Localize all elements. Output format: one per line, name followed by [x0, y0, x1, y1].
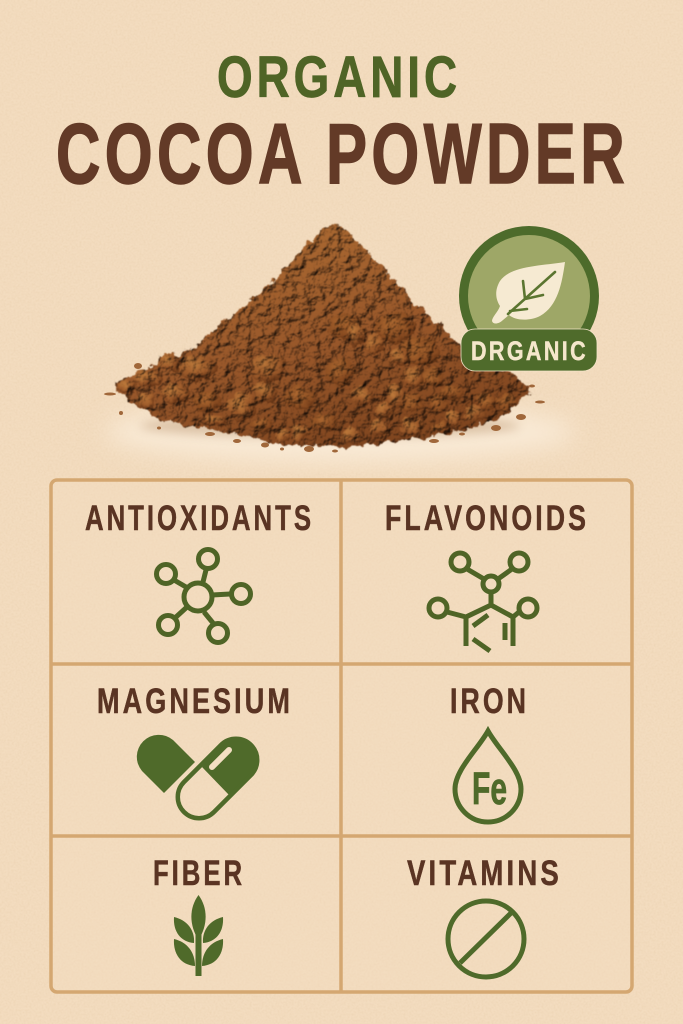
- icon: flavonoid structure: [429, 553, 537, 651]
- icon: capsule pills: [137, 735, 257, 818]
- label: magnesium: MAGNESIUM: [97, 682, 293, 721]
- cell: vitamins: [407, 854, 562, 977]
- label: iron: IRON: [450, 682, 529, 721]
- label: flavonoids: FLAVONOIDS: [385, 499, 589, 538]
- icon: plant sprig: [174, 895, 223, 976]
- cell: fiber: [153, 854, 245, 976]
- cell: antioxidants: [85, 499, 314, 642]
- icon: leaf: [492, 262, 565, 324]
- badge inner disc: [468, 235, 590, 357]
- cell: iron: [450, 682, 529, 822]
- panel: nutrient grid: [51, 480, 632, 992]
- badge: organic seal: [459, 226, 599, 371]
- cell: magnesium: [97, 682, 293, 818]
- badge ribbon: [461, 329, 597, 371]
- title: [56, 45, 629, 202]
- icon: prohibited circle: [448, 901, 524, 977]
- label: antioxidants: ANTIOXIDANTS: [85, 499, 314, 538]
- badge text: DRGANIC: [471, 336, 588, 366]
- cell: flavonoids: [385, 499, 589, 651]
- icon: iron drop: Fe: [472, 763, 507, 814]
- title line: organic: ORGANIC: [217, 45, 461, 110]
- illustration: cocoa powder pile: [104, 223, 575, 462]
- badge ring: [459, 226, 599, 366]
- label: fiber: FIBER: [153, 854, 245, 893]
- icon: molecule: [156, 550, 250, 642]
- label: vitamins: VITAMINS: [407, 854, 562, 893]
